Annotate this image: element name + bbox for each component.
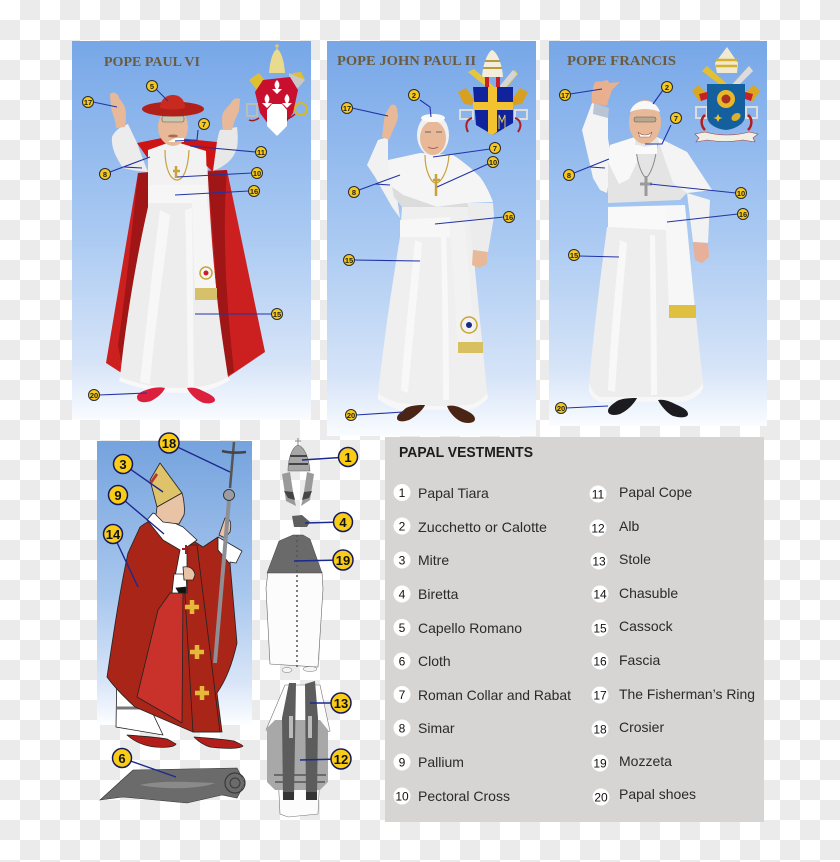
legend item 19: 19	[593, 756, 607, 770]
callout 8	[100, 157, 150, 180]
callout 10	[437, 156, 498, 187]
legend item 11: Papal Cope	[619, 484, 692, 500]
callout 5: 5	[150, 82, 154, 91]
legend item 18: 18	[593, 722, 607, 736]
callout 6	[112, 748, 176, 777]
illustration: Paul VI figure	[106, 93, 265, 403]
legend item 16: 16	[593, 654, 607, 668]
heading: Pope Francis: POPE FRANCIS	[567, 54, 676, 69]
callout 17	[342, 102, 388, 116]
callout 7	[645, 112, 682, 144]
legend item 14: Chasuble	[619, 585, 678, 601]
icon: coat of arms of Paul VI	[247, 44, 307, 136]
legend item 12: Alb	[619, 518, 639, 534]
legend item 5: Capello Romano	[418, 620, 522, 636]
legend item 4	[394, 586, 459, 602]
legend item 17: The Fisherman’s Ring	[619, 686, 755, 702]
callout 8: 8	[103, 170, 107, 179]
callout 17	[560, 89, 602, 100]
legend item 20: 20	[594, 790, 608, 804]
illustration: papal tiara	[282, 438, 314, 506]
legend item 1	[394, 484, 489, 501]
legend item 7: Roman Collar and Rabat	[418, 687, 571, 703]
legend item 6	[394, 652, 451, 670]
legend item 15: Cassock	[619, 618, 674, 634]
panel: bishop figure with chasuble	[97, 433, 252, 748]
legend item 14	[592, 585, 678, 602]
callout 16	[667, 208, 748, 222]
panel: Pope Paul VI	[72, 41, 311, 420]
legend item 4: Biretta	[418, 586, 459, 602]
legend item 3: Mitre	[418, 552, 449, 568]
callout 12	[300, 749, 351, 769]
legend item 13	[590, 551, 651, 570]
callout 6: 6	[118, 751, 126, 766]
legend item 8: 8	[399, 722, 406, 736]
legend item 13: Stole	[619, 551, 651, 567]
legend item 1: 1	[399, 486, 406, 500]
callout 2: 2	[665, 83, 669, 92]
callout 18	[159, 433, 230, 472]
callout 3	[114, 454, 163, 492]
callout 12: 12	[334, 752, 348, 767]
legend item 10: 10	[395, 790, 409, 804]
illustration: vested pope with mitre and crosier	[107, 442, 246, 748]
callout 17: 17	[561, 91, 569, 100]
legend item 2: 2	[399, 520, 406, 534]
illustration: biretta	[292, 515, 310, 527]
callout 15	[568, 250, 619, 260]
callout 1: 1	[344, 450, 352, 465]
callout 17: 17	[84, 98, 92, 107]
panel: Pope Francis	[549, 41, 767, 426]
legend item 9: 9	[399, 756, 406, 770]
callout 8: 8	[567, 171, 571, 180]
legend item 10: Pectoral Cross	[418, 788, 510, 804]
callout 15	[195, 308, 282, 320]
callout 16	[435, 212, 514, 224]
callout 14: 14	[106, 527, 121, 542]
illustration: cassock with mozzetta	[266, 535, 323, 672]
callout 11: 11	[257, 148, 265, 157]
icon: coat of arms of Francis	[692, 47, 760, 142]
callout 2	[408, 90, 431, 117]
heading: Pope John Paul II: POPE JOHN PAUL II	[337, 54, 476, 69]
callout 16: 16	[250, 187, 258, 196]
callout 13: 13	[334, 696, 348, 711]
legend item 5: 5	[399, 621, 406, 635]
legend item 15: 15	[593, 622, 607, 636]
callout 10: 10	[737, 189, 745, 198]
callout 19	[294, 550, 353, 570]
legend item 3	[394, 552, 449, 568]
icon: coat of arms of John Paul II	[458, 50, 528, 135]
legend item 16	[592, 652, 660, 670]
callout 7: 7	[493, 144, 497, 153]
legend item 2: Zucchetto or Calotte	[418, 519, 547, 535]
panel: papal vestments legend	[385, 437, 764, 822]
callout 16	[175, 186, 260, 196]
legend item 13: 13	[592, 554, 606, 568]
callout 10	[177, 168, 262, 178]
callout 14	[104, 524, 138, 587]
panel: Pope John Paul II	[327, 41, 536, 436]
legend item 8	[394, 720, 455, 736]
callout 20	[346, 410, 403, 420]
heading: Pope Paul VI: POPE PAUL VI	[104, 55, 200, 70]
callout 15: 15	[570, 251, 578, 260]
callout 16: 16	[739, 210, 747, 219]
legend item 19: Mozzeta	[619, 753, 672, 769]
legend item 15	[592, 618, 674, 636]
callout 20	[88, 390, 147, 400]
callout 8	[564, 159, 609, 180]
callout 20: 20	[90, 391, 98, 400]
legend item 4: 4	[399, 588, 406, 602]
callout 8	[348, 175, 400, 198]
legend item 9	[394, 754, 464, 770]
callout 2	[653, 82, 672, 104]
legend item 7: 7	[399, 688, 406, 702]
callout 5	[146, 80, 168, 101]
callout 19: 19	[336, 553, 350, 568]
legend item 18	[592, 719, 664, 738]
callout 17	[82, 96, 117, 108]
callout 13	[310, 693, 351, 713]
callout 8: 8	[352, 188, 356, 197]
legend item 16: Fascia	[619, 652, 660, 668]
legend item 14: 14	[593, 588, 607, 602]
callout 10	[650, 184, 746, 198]
callout 2: 2	[412, 91, 416, 100]
legend item 20: Papal shoes	[619, 786, 696, 802]
legend item 1: Papal Tiara	[418, 485, 489, 501]
callout 4: 4	[339, 515, 347, 530]
callout 20: 20	[347, 411, 355, 420]
legend item 20	[592, 786, 696, 806]
legend item 18: Crosier	[619, 719, 664, 735]
legend item 11	[590, 484, 692, 502]
legend item 3: 3	[399, 554, 406, 568]
callout 20	[556, 402, 608, 414]
legend item 6: Cloth	[418, 653, 451, 669]
callout 7	[175, 118, 210, 141]
callout 7: 7	[674, 114, 678, 123]
callout 1	[302, 448, 358, 466]
illustration: Francis figure	[582, 80, 712, 417]
heading: papal vestments: PAPAL VESTMENTS	[399, 445, 533, 461]
legend item 19	[592, 753, 672, 772]
callout 4	[305, 512, 352, 532]
legend item 12: 12	[591, 522, 605, 536]
callout 7: 7	[202, 120, 206, 129]
legend item 8: Simar	[418, 720, 455, 736]
callout 15: 15	[273, 310, 281, 319]
callout 11	[190, 146, 266, 158]
callout 3: 3	[119, 457, 127, 472]
illustration: John Paul II figure	[367, 105, 494, 423]
illustration: alb with stole	[266, 681, 330, 817]
callout 7	[433, 142, 500, 157]
legend item 12	[590, 518, 639, 536]
illustration: rolled cloth	[100, 768, 245, 803]
callout 9: 9	[114, 488, 122, 503]
callout 9	[108, 486, 164, 534]
callout 15: 15	[345, 256, 353, 265]
callout 17: 17	[343, 104, 351, 113]
callout 18: 18	[162, 436, 176, 451]
legend item 17: 17	[593, 688, 607, 702]
legend item 6: 6	[399, 654, 406, 668]
legend item 11: 11	[592, 488, 605, 502]
callout 10: 10	[253, 169, 261, 178]
illustration group: vestment diagrams	[266, 438, 330, 817]
callout 16: 16	[505, 213, 513, 222]
callout 20: 20	[557, 404, 565, 413]
callout 15	[344, 254, 420, 266]
legend item 9: Pallium	[418, 754, 464, 770]
callout 10: 10	[489, 158, 497, 167]
